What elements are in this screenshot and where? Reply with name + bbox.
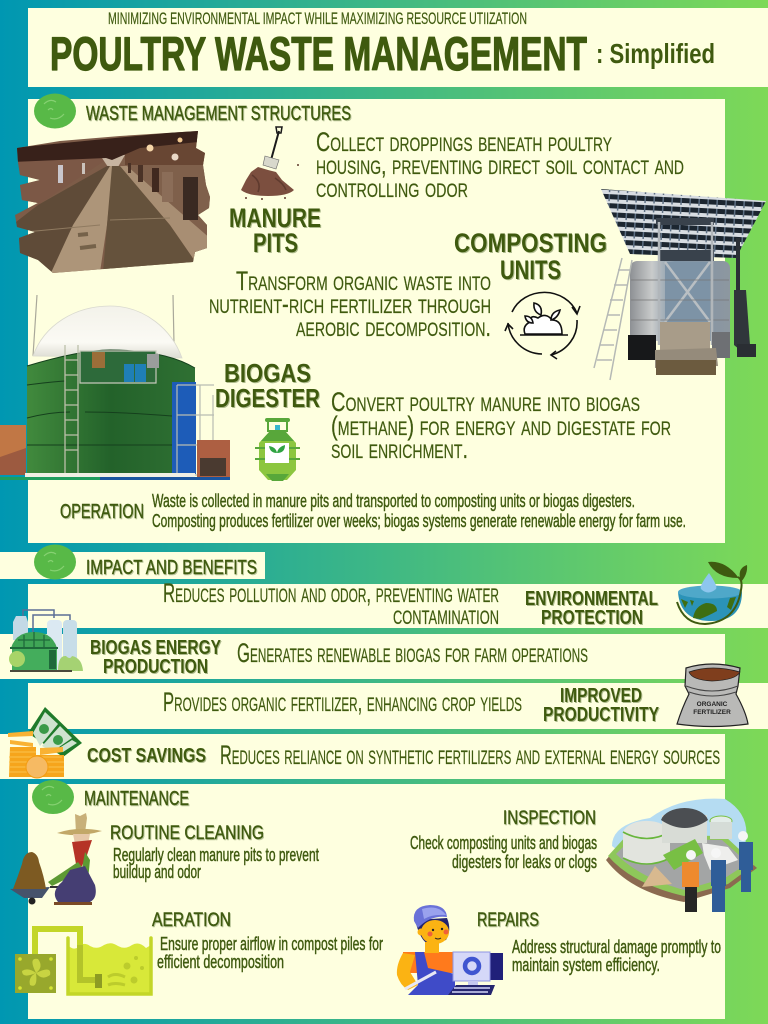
photo: manure pit	[12, 128, 214, 278]
text: productivity description: Provides organic fertilizer, enhancing crop yields	[163, 687, 522, 717]
label: improved productivity	[543, 685, 660, 726]
label: biogas energy production	[90, 637, 222, 678]
text: routine cleaning description: Regularly clean manure pits to prevent	[113, 845, 319, 865]
label: composting units: COMPOSTING	[454, 228, 607, 258]
icon: organic fertilizer sack	[677, 664, 748, 726]
header panel	[28, 8, 768, 87]
icon: organic fertilizer sack: ORGANIC	[697, 701, 728, 708]
text: repairs description: maintain system efficiency.	[512, 955, 660, 975]
text: routine cleaning description	[113, 845, 319, 882]
label: biogas digester	[215, 358, 320, 413]
row: improved productivity	[28, 664, 768, 729]
text: operation description	[152, 491, 686, 531]
label: environmental protection	[525, 588, 658, 629]
text: aeration description: Ensure proper airflow in compost piles for	[160, 934, 383, 954]
photo: biogas digester	[0, 295, 230, 480]
icon: section blob	[32, 780, 74, 814]
label: manure pits: MANURE	[229, 203, 321, 233]
text: inspection description: Check composting units and biogas	[410, 833, 597, 853]
label: environmental protection: PROTECTION	[541, 607, 643, 629]
icon: shovel and manure pile	[241, 127, 299, 200]
row: environmental protection	[28, 562, 768, 630]
label: cost savings: COST SAVINGS	[87, 745, 206, 767]
text: manure pits description: Collect droppings beneath poultry	[316, 127, 612, 157]
text: inspection description: digesters for leaks or clogs	[452, 852, 597, 872]
icon: globe with water drop	[677, 562, 747, 624]
icon: biogas plant	[9, 610, 83, 672]
panel: waste management structures	[0, 94, 766, 543]
illustration: biogas plant inspection	[606, 799, 757, 912]
icon: money and coins	[8, 707, 82, 778]
label: biogas digester: DIGESTER	[215, 383, 320, 413]
icon: organic fertilizer sack: FERTILIZER	[693, 709, 731, 716]
label: composting units	[454, 228, 607, 285]
label: manure pits: PITS	[253, 228, 298, 258]
text: biogas description: soil enrichment.	[331, 434, 468, 464]
text: aeration description	[157, 934, 383, 972]
text: biogas description: Convert poultry manure into biogas	[331, 387, 640, 417]
text: composting description	[209, 266, 491, 342]
label: biogas energy production: PRODUCTION	[103, 656, 208, 678]
label: biogas energy production: BIOGAS ENERGY	[90, 637, 222, 659]
title suffix: : Simplified	[596, 38, 715, 69]
heading strip: impact and benefits	[0, 544, 265, 580]
text: environmental description	[163, 578, 499, 630]
label: biogas digester: BIOGAS	[224, 358, 311, 388]
label: inspection: INSPECTION	[503, 808, 596, 829]
text: repairs description	[512, 937, 721, 975]
icon: compost cycle	[505, 292, 580, 359]
text: composting description: Transform organic waste into	[236, 266, 491, 296]
text: composting description: nutrient-rich fertilizer through	[209, 289, 491, 319]
label: routine cleaning: ROUTINE CLEANING	[110, 823, 264, 844]
text: inspection description	[410, 833, 597, 872]
illustration: farmer with wheelbarrow	[10, 813, 102, 905]
text: manure pits description: controlling odor	[316, 173, 468, 203]
section heading: MAINTENANCE	[84, 788, 189, 810]
icon: section blob	[34, 94, 76, 128]
icon: section blob	[34, 544, 76, 580]
section heading: WASTE MANAGEMENT STRUCTURES	[86, 103, 351, 125]
panel: maintenance	[10, 780, 757, 1019]
text: environmental description: contamination	[393, 600, 499, 630]
subtitle: MINIMIZING ENVIRONMENTAL IMPACT WHILE MAXIMIZING RESOURCE UTIIZATION	[108, 9, 527, 28]
text: manure pits description	[316, 127, 684, 203]
row: biogas energy production	[0, 610, 725, 679]
label: manure pits	[229, 203, 321, 258]
row: cost savings	[0, 707, 725, 779]
label: environmental protection: ENVIRONMENTAL	[525, 588, 658, 610]
text: aeration description: efficient decomposition	[157, 952, 284, 972]
text: composting description: aerobic decomposition.	[296, 312, 491, 342]
text: routine cleaning description: buildup and odor	[113, 862, 201, 882]
icon: gas cylinder	[255, 418, 300, 481]
text: biogas description	[331, 387, 671, 464]
section heading: IMPACT AND BENEFITS	[86, 557, 257, 579]
text: environmental description: Reduces pollution and odor, preventing water	[163, 578, 499, 608]
illustration: repair worker with computer	[397, 905, 503, 995]
label: improved productivity: IMPROVED	[560, 685, 642, 707]
label: composting units: UNITS	[500, 255, 561, 285]
label: aeration: AERATION	[152, 910, 231, 931]
label: repairs: REPAIRS	[477, 910, 539, 931]
label: improved productivity: PRODUCTIVITY	[543, 704, 660, 726]
illustration: aeration fan and tank	[15, 929, 151, 994]
label: operation: OPERATION	[60, 501, 144, 523]
photo: composting unit	[594, 189, 766, 380]
